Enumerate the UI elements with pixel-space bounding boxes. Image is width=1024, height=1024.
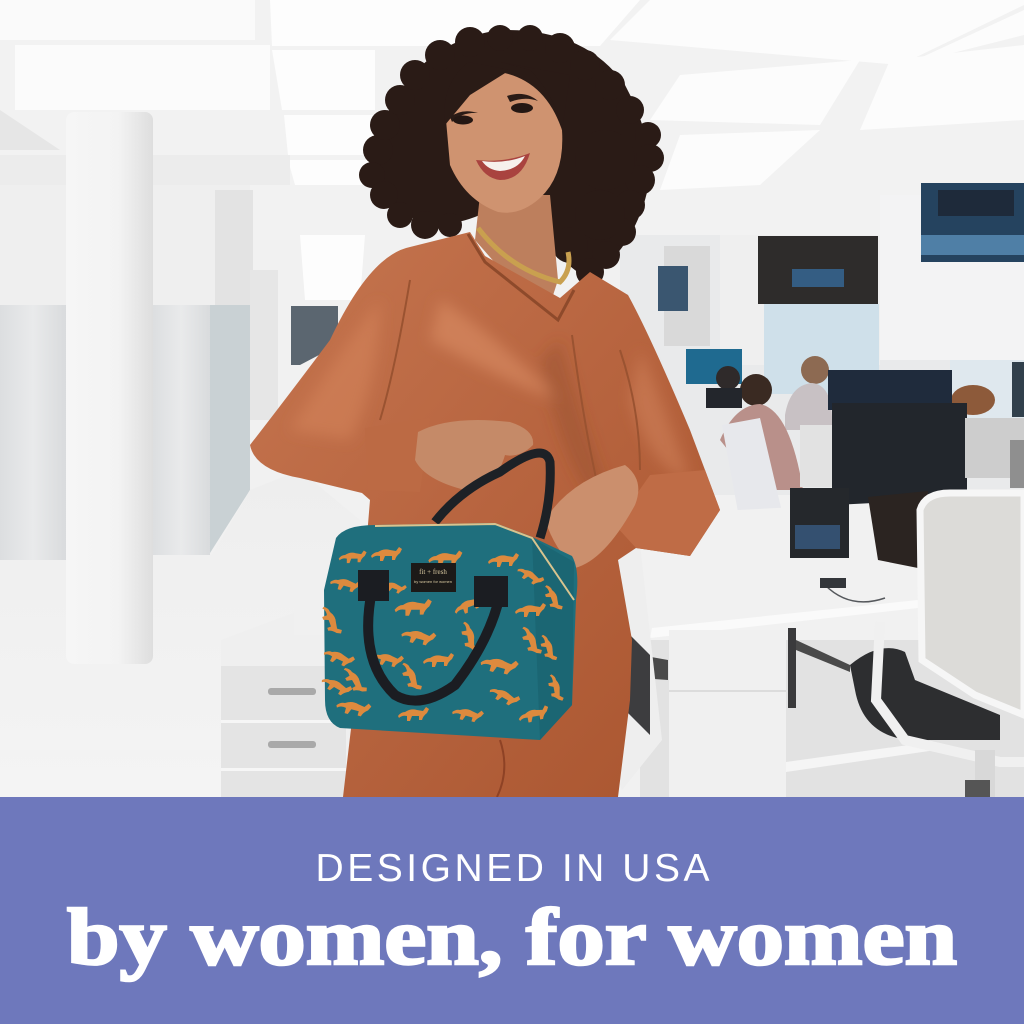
- woman: [250, 25, 720, 797]
- neck: [475, 195, 558, 320]
- necklace: [478, 228, 569, 282]
- label patch: by women for women: [414, 579, 452, 584]
- right wall & screens: [620, 183, 1024, 495]
- back wall left: [0, 185, 250, 305]
- chair right: [850, 493, 1024, 797]
- bag handles: [368, 590, 500, 701]
- top handle: [435, 453, 550, 538]
- dark window far: [291, 306, 338, 365]
- face: [444, 62, 570, 213]
- label patch: [411, 563, 456, 592]
- people far right: [706, 356, 995, 490]
- banner: [0, 797, 1024, 1024]
- pant leg shading: [497, 740, 504, 797]
- heading: designed in usa: DESIGNED IN USA: [316, 847, 712, 890]
- drawers left: [221, 565, 350, 797]
- chair left of woman: [612, 545, 662, 790]
- glass partition left: [0, 305, 250, 561]
- hair back: [359, 25, 664, 286]
- hands: [415, 420, 638, 568]
- monitors: [722, 370, 1024, 512]
- torso & blouse: [250, 232, 720, 797]
- column: [66, 112, 278, 664]
- label patch: fit + fresh: [419, 568, 447, 576]
- leopard print: [319, 547, 564, 725]
- headline: by women, for women: by women, for women: [67, 894, 957, 982]
- photo background: office: [0, 0, 1024, 797]
- lunch bag: [319, 453, 577, 740]
- ceiling: [0, 0, 1024, 300]
- floor: [0, 470, 360, 797]
- desk: [640, 488, 1024, 797]
- bag body: [324, 523, 577, 740]
- floor right: [640, 640, 1024, 797]
